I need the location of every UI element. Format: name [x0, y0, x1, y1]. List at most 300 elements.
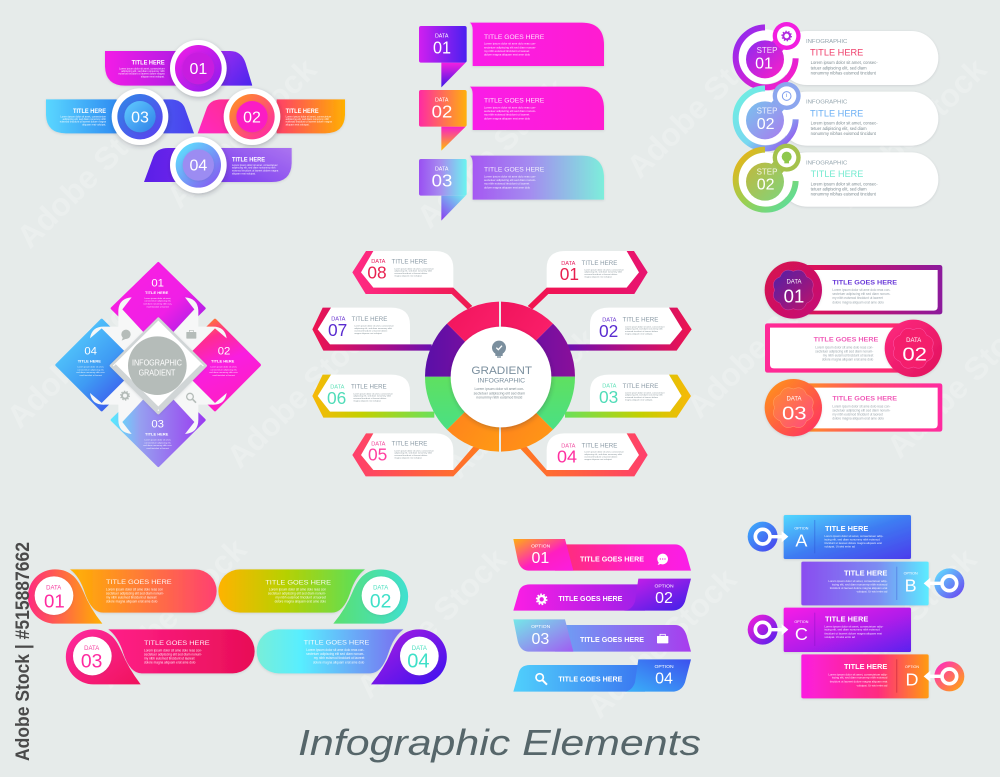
frame 02: DATA — [906, 338, 921, 344]
option C: TITLE HERE — [825, 614, 868, 623]
label 01: mod tincidunt ut laoreet — [146, 305, 169, 308]
callout 04: DATA — [561, 443, 576, 449]
ribbon 02: OPTION — [654, 583, 674, 589]
callout 08: Lorem ipsum dolor sit amet, consectetuer — [394, 267, 434, 270]
callout 03: 03 — [599, 387, 618, 407]
label 02: mod tincidunt ut laoreet — [212, 374, 235, 377]
diamond 03 — [112, 375, 204, 466]
item 03: TITLE HERE — [73, 108, 106, 115]
step 02: TITLE HERE — [810, 108, 863, 118]
callout 05: magna aliquam erat volutpat. — [394, 457, 423, 460]
callout 01 — [528, 251, 648, 309]
item 01 — [105, 40, 252, 97]
callout 08: adipiscing elit, sed diam nonummy nibh — [394, 270, 433, 273]
item 04: 04 — [189, 158, 207, 175]
item 04: euismod tincidunt ut laoreet dolore magna — [232, 169, 279, 172]
callout 02: Lorem ipsum dolor sit amet, consectetuer — [625, 325, 665, 328]
banner 03: dolore magna aliquam erat ame dolo — [484, 185, 530, 189]
bar 03: sectetuer adipiscing elit sed diam nonum- — [144, 652, 202, 656]
centre diamond badge: GRADIENT — [139, 368, 175, 377]
bar 02: dolore magna aliquam erat ame dolo — [275, 600, 326, 604]
option B: B — [905, 576, 917, 596]
bar 03: 03 — [81, 652, 102, 673]
banner 03 — [419, 156, 604, 221]
callout 01: Lorem ipsum dolor sit amet, consectetuer — [584, 268, 624, 271]
option A — [748, 515, 911, 559]
label 04: sed diam nonummy nibh euis- — [76, 372, 105, 374]
callout 06: Lorem ipsum dolor sit amet, consectetuer — [353, 392, 393, 395]
frame 03: dolore magna aliquam erat ame dolo — [832, 417, 884, 421]
panel: options A-D — [748, 515, 964, 698]
watermark: Adobe Stock — [0, 271, 163, 435]
callout 01: 01 — [560, 264, 579, 284]
watermark: Adobe Stock — [9, 91, 173, 255]
callout 05: Lorem ipsum dolor sit amet, consectetuer — [394, 449, 434, 452]
banner 01 — [419, 23, 604, 87]
centre diamond badge — [111, 319, 206, 413]
ribbon 01: TITLE GOES HERE — [580, 554, 644, 563]
item 03: aliquam erat volutpat. — [82, 124, 106, 127]
panel: data frames with seals — [765, 261, 942, 436]
ribbon 04: TITLE GOES HERE — [558, 675, 622, 684]
item 02: TITLE HERE — [286, 108, 319, 115]
ribbon 01: OPTION — [531, 543, 551, 549]
item 02: Lorem ipsum dolor sit amet, consectetuer — [286, 115, 331, 118]
step 03: TITLE HERE — [811, 169, 863, 179]
callout 05: TITLE HERE — [392, 441, 427, 448]
bar 01: DATA — [46, 586, 61, 592]
bar 04: Lorem ipsum dolor sit ame dolo reas con- — [306, 648, 364, 652]
bar 02: DATA — [373, 586, 388, 592]
label 03 — [143, 419, 172, 450]
item 03: Lorem ipsum dolor sit amet, consectetuer — [60, 115, 106, 118]
callout 05: DATA — [371, 441, 386, 447]
watermark: Adobe Stock — [619, 21, 783, 185]
callout 04 — [520, 433, 648, 476]
item 03: adipiscing elit, sed diam nonummy nibh — [63, 118, 107, 121]
frame 01: 01 — [784, 286, 804, 307]
banner 02: 02 — [432, 101, 452, 121]
step 02: Lorem ipsum dolor sit amet, consec- — [811, 121, 878, 126]
ribbon 02: TITLE GOES HERE — [558, 594, 622, 603]
centre disc: sectetuer adipiscing elit sed diam — [474, 391, 525, 395]
label 04 — [76, 346, 105, 377]
panel: circle steps 01-04 — [46, 40, 345, 193]
option A: tincidunt ut laoreet dolore magna aliquam erat — [824, 541, 882, 545]
callout 02: magna aliquam erat volutpat. — [625, 333, 653, 336]
option B: Lorem ipsum dolor sit amet, consectetuer adip- — [828, 579, 887, 583]
option D: iscing elit, sed diam nonummy nibh euismod — [832, 676, 888, 680]
panel: diamond gradient — [57, 263, 260, 466]
item 03: 03 — [131, 109, 149, 126]
bar 01: my nibh euismod tincidunt ut laoreet — [106, 595, 157, 599]
banner 02: Lorem ipsum dolor sit ame dolo reas con- — [484, 105, 536, 109]
bar 01: sectetuer adipiscing elit sed diam nonum- — [106, 591, 164, 595]
option D — [801, 654, 964, 698]
stock credit: Adobe Stock | #515887662 — [13, 542, 34, 761]
icon: bulb — [782, 152, 792, 163]
bar 03: dolore magna aliquam erat ame dolo — [144, 661, 196, 665]
step 02: STEP — [757, 107, 777, 116]
bar 02 — [218, 569, 408, 624]
frame 02: TITLE GOES HERE — [814, 337, 879, 344]
panel: step pills — [736, 22, 938, 210]
callout 07: magna aliquam erat volutpat. — [354, 332, 383, 335]
option C: iscing elit, sed diam nonummy nibh euismod — [824, 628, 880, 632]
frame 02: 02 — [902, 343, 927, 364]
step 02: 02 — [757, 116, 775, 133]
callout 04: TITLE HERE — [582, 442, 617, 449]
option D: Lorem ipsum dolor sit amet, consectetuer adip- — [828, 672, 887, 676]
frame 03: Lorem ipsum dolor sit ame dolo reas con- — [832, 404, 890, 408]
item 01: Lorem ipsum dolor sit amet, consectetuer — [119, 67, 165, 70]
callout 03: adipiscing elit, sed diam nonummy nibh — [625, 394, 663, 397]
banner 01: DATA — [435, 34, 449, 40]
icon: clock — [782, 92, 791, 100]
item 04: adipiscing elit, sed diam nonummy nibh — [232, 167, 276, 170]
option D: tincidunt ut laoreet dolore magna aliquam erat — [830, 679, 888, 683]
label 02: 02 — [218, 346, 230, 358]
bar 01: Lorem ipsum dolor sit ame dolo reas con — [106, 587, 163, 591]
option C — [748, 608, 911, 652]
callout 06: 06 — [327, 388, 346, 408]
step 03: nonummy nibhas euismod tincidunt — [811, 192, 877, 197]
callout 05: adipiscing elit, sed diam nonummy nibh — [394, 452, 433, 455]
label 01: consectetuer adipiscing elit, — [144, 300, 171, 303]
ribbon 04 — [513, 659, 691, 692]
step 02: INFOGRAPHIC — [806, 100, 847, 106]
option B: iscing elit, sed diam nonummy nibh euismod — [832, 582, 888, 586]
icon: briefcase — [186, 330, 196, 339]
label 04: Lorem ipsum dolor sit amet, — [77, 366, 104, 369]
banner 03: DATA — [435, 167, 449, 173]
option D: volutpat. Ut wisi enim ad — [857, 683, 888, 687]
step 01 — [736, 22, 938, 87]
banner 03: 03 — [432, 171, 452, 191]
label 01: sed diam nonummy nibh euis- — [143, 303, 172, 305]
watermark: Adobe Stock — [349, 541, 513, 705]
frame 01: my nibh euismod tincidunt ut laoreet — [832, 296, 883, 300]
watermark: Adobe Stock — [159, 51, 323, 215]
banner 01: Lorem ipsum dolor sit ame dolo reas con- — [484, 42, 536, 46]
callout 07: 07 — [328, 320, 347, 340]
label 03: Lorem ipsum dolor sit amet, — [144, 439, 171, 442]
frame 01: DATA — [786, 280, 802, 286]
watermark: Adobe Stock — [819, 541, 983, 705]
step 01: INFOGRAPHIC — [806, 39, 847, 45]
callout 03 — [565, 375, 691, 418]
ring segments — [425, 302, 575, 452]
bar 03: Lorem ipsum dolor sit ame dolo reas con- — [144, 648, 202, 652]
banner 02: dolore magna aliquam erat ame dolo — [484, 116, 530, 120]
watermark: Adobe Stock — [219, 311, 383, 475]
item 02: adipiscing elit, sed diam nonummy nibh — [286, 118, 330, 121]
option B — [801, 562, 964, 605]
bar 03 — [66, 629, 255, 684]
bar 02: sectetuer adipiscing elit sed diam nonum- — [268, 591, 326, 595]
watermark: Adobe Stock — [439, 321, 603, 485]
panel: teardrop bars — [28, 569, 447, 684]
bar 04: my nibh euismod tincidunt ut laoreet — [314, 656, 364, 660]
ribbon 01: 01 — [531, 550, 549, 567]
callout 03: euismod tincidunt ut laoreet dolore — [625, 396, 659, 399]
frame 02: dolore magna aliquam erat ame dolo — [822, 358, 874, 362]
label 02: Lorem ipsum dolor sit amet, — [210, 366, 237, 369]
callout 08: euismod tincidunt ut laoreet dolore — [394, 272, 428, 275]
bar 04: DATA — [412, 646, 427, 652]
callout 03: Lorem ipsum dolor sit amet, consectetuer — [625, 391, 665, 394]
callout 02 — [567, 308, 692, 351]
callout 02: TITLE HERE — [623, 317, 658, 324]
callout 01: adipiscing elit, sed diam nonummy nibh — [584, 271, 623, 274]
label 02: sed diam nonummy nibh euis- — [209, 372, 238, 374]
banner 02: my nibh euismod tincidunt ut laoreet — [484, 113, 529, 117]
step 01: tetuer adipiscing elit, sed diam — [811, 65, 867, 70]
callout 05: 05 — [368, 445, 387, 465]
option B: TITLE HERE — [844, 569, 887, 578]
step 02 — [736, 82, 938, 148]
watermark: Adobe Stock — [679, 261, 843, 425]
callout 02: adipiscing elit, sed diam nonummy nibh — [625, 328, 663, 331]
callout 03: DATA — [602, 384, 617, 390]
watermark: Adobe Stock — [579, 561, 743, 725]
label 03: TITLE HERE — [145, 431, 169, 436]
item 02 — [198, 88, 345, 145]
frame 03: my nibh euismod tincidunt ut laoreet — [832, 412, 883, 416]
step 01: TITLE HERE — [810, 48, 863, 58]
callout 07: DATA — [331, 317, 346, 323]
frame 02 — [765, 320, 942, 377]
step 02: tetuer adipiscing elit, sed diam — [811, 126, 867, 131]
bar 04: sectetuer adipiscing elit sed diam nonum- — [306, 652, 364, 656]
option A: OPTION — [794, 526, 809, 530]
ribbon 01 — [513, 539, 691, 571]
callout 04: Lorem ipsum dolor sit amet, consectetuer — [584, 451, 624, 454]
bar 01 — [28, 569, 217, 624]
label 02: consectetuer adipiscing elit, — [210, 368, 237, 371]
item 03: euismod tincidunt ut laoreet dolore magna — [60, 121, 107, 124]
item 01: euismod tincidunt ut laoreet dolore magna — [118, 73, 165, 76]
frame 02: my nibh euismod tincidunt ut laoreet — [823, 353, 873, 357]
frame 02: Lorem ipsum dolor sit ame dolo reas con- — [815, 345, 873, 349]
callout 04: euismod tincidunt ut laoreet dolore — [584, 455, 618, 458]
banner 01: TITLE GOES HERE — [484, 34, 545, 41]
label 01: TITLE HERE — [145, 290, 169, 295]
bar 01: dolore magna aliquam erat ame dolo — [106, 600, 158, 604]
option B: tincidunt ut laoreet dolore magna aliquam erat — [830, 586, 888, 590]
frame 03: DATA — [786, 397, 802, 403]
icon: chat — [657, 554, 668, 565]
ribbon 04: 04 — [655, 671, 673, 688]
bar 01: TITLE GOES HERE — [106, 579, 172, 586]
item 01: TITLE HERE — [132, 60, 165, 67]
option C: C — [795, 624, 808, 644]
label 02 — [209, 346, 238, 377]
item 04: aliquam erat volutpat. — [232, 172, 256, 175]
callout 06: DATA — [330, 384, 345, 390]
callout 06 — [312, 375, 434, 418]
option B: volutpat. Ut wisi enim ad — [857, 590, 888, 594]
frame 03: sectetuer adipiscing elit sed diam nonum- — [832, 408, 890, 412]
banner 01: 01 — [433, 38, 451, 58]
ribbon 03 — [513, 619, 691, 652]
bar 02: Lorem ipsum dolor sit ame dolo reas con — [269, 587, 326, 591]
option C: tincidunt ut laoreet dolore magna aliquam erat — [824, 631, 882, 635]
callout 04: magna aliquam erat volutpat. — [584, 458, 613, 461]
label 04: consectetuer adipiscing elit, — [77, 368, 104, 371]
callout 06: magna aliquam erat volutpat. — [353, 400, 382, 403]
step 02: nonummy nibhas euismod tincidunt — [811, 131, 877, 136]
panel: option ribbons — [513, 539, 691, 692]
item 04: TITLE HERE — [232, 156, 265, 163]
option B: OPTION — [904, 571, 918, 575]
banner 02: TITLE GOES HERE — [484, 98, 545, 105]
white cross lobes — [90, 297, 227, 434]
watermark: Adobe Stock — [89, 531, 253, 695]
banner 03: my nibh euismod tincidunt ut laoreet — [484, 182, 529, 186]
centre disc: GRADIENT — [471, 365, 533, 377]
callout 04: 04 — [557, 447, 577, 467]
callout 01: euismod tincidunt ut laoreet dolore — [584, 273, 618, 276]
callout 01: magna aliquam erat volutpat. — [584, 275, 613, 278]
callout 01: TITLE HERE — [582, 260, 617, 267]
bar 03: my nibh euismod tincidunt ut laoreet — [144, 656, 195, 660]
step 03: INFOGRAPHIC — [806, 161, 847, 167]
banner 03: Lorem ipsum dolor sit ame dolo reas con- — [484, 174, 536, 178]
banner 01: my nibh euismod tincidunt ut laoreet — [484, 49, 529, 53]
callout 01: DATA — [561, 261, 576, 267]
banner 01: dolore magna aliquam erat ame dolo — [484, 53, 530, 57]
centre diamond badge: INFOGRAPHIC — [132, 358, 182, 367]
icon: bulb with check — [492, 341, 506, 358]
ribbon 02: 02 — [655, 590, 673, 607]
callout 06: adipiscing elit, sed diam nonummy nibh — [353, 395, 392, 398]
banner 02 — [419, 87, 604, 151]
label 03: sed diam nonummy nibh euis- — [143, 445, 172, 447]
icon: chat — [121, 330, 131, 341]
item 01: adipiscing elit, sed diam nonummy nibh — [121, 70, 165, 73]
diamond 02 — [170, 320, 260, 410]
centre disc — [451, 327, 551, 427]
bar 04: TITLE GOES HERE — [304, 640, 370, 647]
label 04: TITLE HERE — [78, 359, 101, 364]
callout 08: TITLE HERE — [392, 258, 427, 265]
frame 03 — [765, 379, 942, 436]
callout 02: 02 — [599, 321, 618, 341]
frame 03: 03 — [782, 402, 807, 423]
frame 02: sectetuer adipiscing elit sed diam nonum- — [815, 349, 873, 353]
option D: TITLE HERE — [844, 662, 887, 671]
callout 02: euismod tincidunt ut laoreet dolore — [625, 330, 659, 333]
option C: OPTION — [794, 620, 809, 624]
diamond 01 — [112, 263, 204, 354]
item 02: aliquam erat volutpat. — [286, 124, 310, 127]
step 03: tetuer adipiscing elit, sed diam — [811, 187, 867, 192]
callout 02: DATA — [602, 318, 617, 324]
icon: gear — [537, 594, 547, 604]
callout 08 — [352, 251, 472, 309]
option A: volutpat. Ut wisi enim ad — [824, 545, 855, 549]
option C: volutpat. Ut wisi enim ad — [824, 635, 855, 639]
icon: gear — [121, 391, 129, 400]
bar 04: 04 — [407, 651, 429, 673]
label 01 — [143, 278, 172, 308]
callout 06: TITLE HERE — [351, 384, 387, 391]
watermark: Adobe Stock — [829, 51, 993, 215]
callout 07: Lorem ipsum dolor sit amet, consectetuer — [354, 325, 394, 328]
banner 02: sectetuer adipiscing elit sed diam nonum- — [484, 109, 536, 113]
callout 05 — [352, 433, 480, 476]
callout 07: TITLE HERE — [352, 316, 387, 323]
diamond 04 — [57, 320, 147, 410]
icon: briefcase — [657, 634, 668, 643]
item 04: Lorem ipsum dolor sit amet, consectetuer — [232, 164, 278, 167]
option A: A — [795, 531, 807, 551]
label 04: 04 — [84, 346, 97, 358]
bar 03: TITLE GOES HERE — [144, 640, 210, 647]
option A: TITLE HERE — [825, 524, 868, 533]
centre disc: Lorem ipsum dolor sit amet con- — [474, 387, 524, 391]
frame 03: TITLE GOES HERE — [832, 395, 898, 402]
callout 07 — [312, 308, 432, 351]
option A: Lorem ipsum dolor sit amet, consectetuer adip- — [824, 534, 883, 538]
item 02: 02 — [243, 109, 261, 126]
centre disc: INFOGRAPHIC — [477, 378, 525, 385]
watermark: Adobe Stock — [409, 71, 573, 235]
banner 01: sectetuer adipiscing elit sed diam nonum- — [484, 45, 536, 49]
step 01: 01 — [755, 55, 773, 72]
callout 08: DATA — [371, 259, 386, 265]
ribbon 02 — [513, 579, 691, 611]
frame 01: Lorem ipsum dolor sit ame dolo reas con- — [832, 288, 890, 292]
option D: D — [905, 669, 918, 689]
callout 07: euismod tincidunt ut laoreet dolore — [354, 329, 388, 332]
step 03: STEP — [757, 167, 777, 176]
ribbon 03: OPTION — [531, 624, 551, 630]
banner 02: DATA — [435, 97, 449, 103]
frame 01: TITLE GOES HERE — [832, 279, 898, 286]
bar 02: TITLE GOES HERE — [265, 579, 332, 586]
callout 03: magna aliquam erat volutpat. — [625, 399, 653, 402]
step 01: Lorem ipsum dolor sit amet, consec- — [811, 60, 878, 65]
item 03 — [46, 88, 194, 145]
label 01: 01 — [151, 278, 164, 290]
step 01: STEP — [757, 46, 777, 55]
bar 02: 02 — [370, 591, 391, 612]
icon: gear — [782, 31, 791, 41]
step 03: 02 — [757, 177, 775, 194]
callout 06: euismod tincidunt ut laoreet dolore — [353, 397, 387, 400]
icon: magnifier — [536, 674, 547, 685]
item 01: aliquam erat volutpat. — [141, 76, 165, 79]
option D: OPTION — [905, 665, 919, 669]
step 03 — [736, 144, 938, 210]
bar 01: 01 — [44, 590, 65, 611]
step 01: nonummy nibhas euismod tincidunt — [811, 70, 877, 75]
bar 04 — [257, 629, 447, 684]
callout 08: magna aliquam erat volutpat. — [394, 275, 423, 278]
label 03: 03 — [151, 419, 164, 431]
step 03: Lorem ipsum dolor sit amet, consec- — [811, 182, 878, 187]
label 04: mod tincidunt ut laoreet — [79, 374, 102, 377]
label 01: Lorem ipsum dolor sit amet, — [144, 297, 171, 300]
item 04 — [144, 137, 292, 193]
item 01: 01 — [189, 61, 207, 78]
panel: data banners 01-03 — [419, 23, 604, 221]
bar 02: my nibh euismod tincidunt ut laoreet — [275, 595, 326, 599]
frame 01: sectetuer adipiscing elit sed diam nonum- — [832, 292, 890, 296]
frame 01: dolore magna aliquam erat ame dolo — [832, 300, 884, 304]
